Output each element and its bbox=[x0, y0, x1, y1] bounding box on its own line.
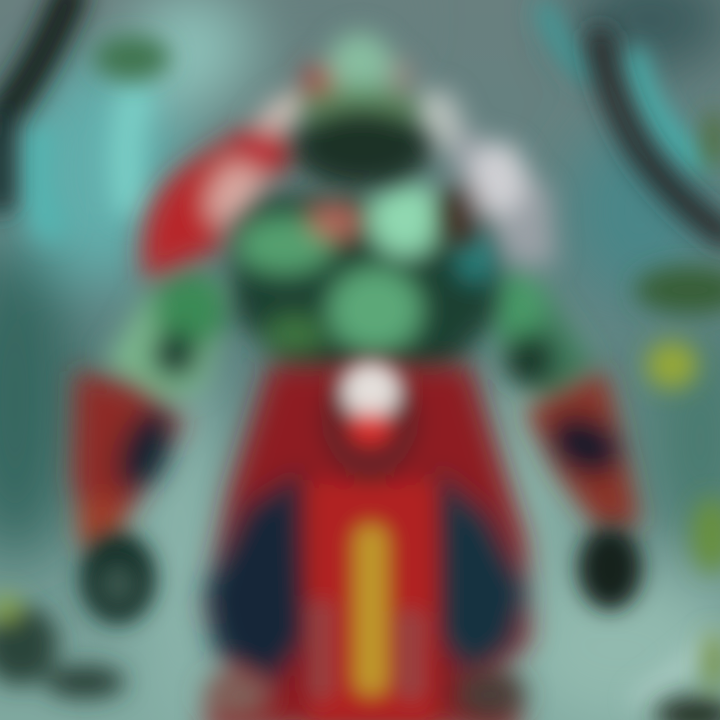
warrior figure bbox=[72, 33, 642, 720]
torso bbox=[225, 180, 510, 375]
upper arms bbox=[105, 271, 595, 410]
central tabard bbox=[308, 480, 435, 720]
shoulder armour bbox=[142, 84, 555, 280]
boots bbox=[204, 669, 526, 720]
fists bbox=[80, 526, 642, 624]
forearm right bbox=[525, 370, 640, 530]
forearm left bbox=[72, 370, 185, 555]
skirt bbox=[200, 365, 530, 720]
belt buckle bbox=[320, 360, 420, 480]
head and helmet bbox=[292, 33, 432, 188]
tree branches bbox=[0, 0, 720, 235]
